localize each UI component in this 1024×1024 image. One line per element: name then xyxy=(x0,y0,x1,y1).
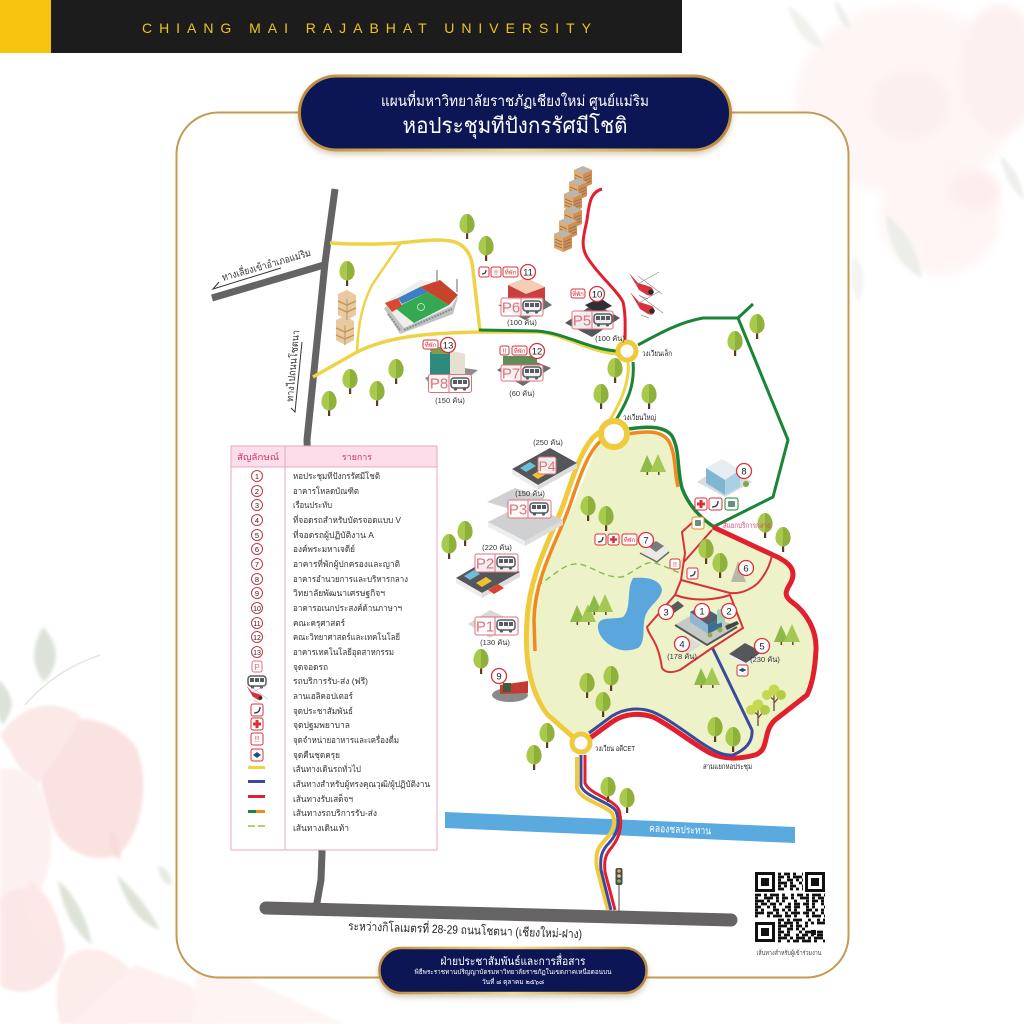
yellow west campus route xyxy=(526,432,600,745)
route network xyxy=(313,189,816,910)
building 9 xyxy=(492,668,528,702)
legend header symbol: สัญลักษณ์ xyxy=(237,451,279,462)
top banner xyxy=(0,0,682,53)
trees xyxy=(321,214,800,813)
legend number symbols: 12 xyxy=(253,635,261,642)
legend item list: จุดจำหน่ายอาหารและเครื่องดื่ม xyxy=(293,734,399,746)
lodging tag 13: ที่พัก xyxy=(425,341,437,349)
legend item list: อาคารอำนวยการและบริหารกลาง xyxy=(293,574,408,584)
PR tag 7 xyxy=(595,534,606,545)
walking path xyxy=(537,563,680,586)
legend number symbols: 8 xyxy=(255,575,259,584)
capacity P5: (100 คัน) xyxy=(595,334,625,343)
food tag 11: !! xyxy=(494,270,498,277)
legend number symbols: 4 xyxy=(255,516,259,525)
PR tag xyxy=(687,568,698,579)
badge number 6: 6 xyxy=(743,564,749,574)
tower beside stadium xyxy=(336,290,356,345)
QR code xyxy=(755,874,825,941)
legend line blue xyxy=(248,780,265,783)
P6 building 11 xyxy=(479,264,552,327)
legend item list: เส้นทางรถบริการรับ-ส่ง xyxy=(293,808,377,818)
P4 lot xyxy=(512,438,577,490)
blue dignitary route xyxy=(589,647,752,755)
orange shuttle west campus xyxy=(534,438,605,651)
capacity P7: (60 คัน) xyxy=(509,389,535,398)
helicopter pad xyxy=(629,272,663,318)
legend food symbol: !! xyxy=(255,735,259,744)
lodging tag 7: ที่พัก xyxy=(624,536,636,544)
lake xyxy=(598,578,662,650)
building 3 xyxy=(658,601,684,620)
badge number 10: 10 xyxy=(592,290,602,300)
P1 lot xyxy=(468,610,518,647)
white map panel xyxy=(176,112,848,978)
legend first aid symbol xyxy=(251,718,263,730)
banner black bar xyxy=(51,0,682,53)
legend item list: จุดจอดรถ xyxy=(293,662,328,673)
legend item list: เส้นทางรับเสด็จฯ xyxy=(293,793,353,804)
capacity 5: (230 คัน) xyxy=(750,655,780,664)
campus green area xyxy=(527,432,815,758)
parking badge P2: P2 xyxy=(476,556,494,572)
parking badge P6: P6 xyxy=(502,300,520,316)
footer subtitle: พิธีพระราชทานปริญญาบัตรมหาวิทยาลัยราชภัฏในเขตภาคเหนือตอนบน xyxy=(414,968,612,976)
main horizontal road xyxy=(266,908,731,920)
legend parking symbol: P xyxy=(254,663,260,672)
circle labels xyxy=(595,348,770,771)
legend item list: อาคารเทคโนโลยีอุตสาหกรรม xyxy=(293,647,394,658)
road caption: ระหว่างกิโลเมตรที่ 28-29 ถนนโชตนา (เชียงใหม่-ฝาง) xyxy=(348,917,582,941)
legend item list: ที่จอดรถผู้ปฏิบัติงาน A xyxy=(293,529,374,541)
PR phone tag 11 xyxy=(479,267,489,277)
legend item list: หอประชุมทีปังกรรัศมีโชติ xyxy=(293,471,380,482)
canal xyxy=(445,812,795,843)
legend line shuttle xyxy=(248,810,265,813)
badge number 4: 4 xyxy=(679,640,685,650)
parking 5 xyxy=(729,638,780,676)
background flowers bottom left xyxy=(0,627,345,1024)
legend item list: คณะครุศาสตร์ xyxy=(293,618,345,629)
legend item list: เส้นทางเดินรถทั่วไป xyxy=(293,763,361,774)
legend food symbol xyxy=(251,733,263,745)
badge number 5: 5 xyxy=(759,642,765,652)
legend helicopter symbol xyxy=(246,685,268,702)
roundabout large xyxy=(601,421,627,447)
PR tag 8 xyxy=(709,498,722,510)
legend number symbols: 9 xyxy=(255,589,259,598)
legend number symbols: 10 xyxy=(253,606,261,613)
lodging tag 12: ที่พัก xyxy=(514,347,526,355)
link green between circles xyxy=(616,362,633,420)
legend header xyxy=(231,446,437,850)
direction label Chotana: ทางไปถนนโชตนา xyxy=(283,329,302,402)
shuttle stop tag xyxy=(692,517,704,529)
gown tag xyxy=(737,665,748,676)
legend item list: จุดคืนชุดครุย xyxy=(293,750,340,761)
legend bus symbol xyxy=(248,676,266,689)
label auditorium junction: สามแยกหอประชุม xyxy=(703,762,752,771)
capacity P2: (220 คัน) xyxy=(482,543,512,552)
food tag 12: !! xyxy=(503,348,506,356)
parking 4 xyxy=(667,635,702,661)
footer date: วันที่ ๘ ตุลาคม ๒๕๖๘ xyxy=(482,977,544,986)
green shuttle to small circle xyxy=(479,330,616,351)
legend item list: เส้นทางสำหรับผู้ทรงคุณวุฒิ/ผู้ปฏิบัติงาน xyxy=(293,779,430,790)
building 2 xyxy=(717,604,739,630)
legend item list: อาคารที่พักผู้ปกครองและญาติ xyxy=(293,558,400,570)
P7 building 12 xyxy=(497,344,551,398)
shuttle tag 8 xyxy=(725,498,738,510)
badge number 11: 11 xyxy=(523,268,533,278)
QR caption: เส้นทางสำหรับผู้เข้าร่วมงาน xyxy=(756,949,822,957)
legend table xyxy=(231,446,437,850)
canal label: คลองชลประทาน xyxy=(649,823,711,837)
parking badge P3: P3 xyxy=(509,502,527,518)
main grey roads xyxy=(212,189,731,920)
direction label Mae Rim: ทางเลี่ยงเข้าอำเภอแม่ริม xyxy=(220,245,312,284)
first aid tag 7 xyxy=(608,534,619,545)
road to Chotana xyxy=(307,189,335,908)
building 8 xyxy=(695,459,752,510)
badge number 8: 8 xyxy=(741,466,747,478)
legend item list: อาคารอเนกประสงค์ด้านภาษาฯ xyxy=(293,603,402,613)
banner university name: CHIANG MAI RAJABHAT UNIVERSITY xyxy=(142,20,592,36)
P3 lot xyxy=(487,488,563,546)
badge number 2: 2 xyxy=(726,606,732,618)
legend number symbols: 1 xyxy=(255,472,259,481)
branch road to Mae Rim xyxy=(212,265,324,298)
inner red route lower loop xyxy=(647,522,772,672)
green shuttle top xyxy=(628,427,716,528)
tricolour entry blue xyxy=(581,755,618,910)
label central services junction: สี่แยกบริการกลาง xyxy=(723,520,770,530)
P2 lot xyxy=(456,543,520,598)
general yellow roads north xyxy=(330,240,480,331)
roundabout small xyxy=(618,342,636,360)
title line two: หอประชุมทีปังกรรัศมีโชติ xyxy=(402,113,628,139)
legend item list: ที่จอดรถสำหรับบัตรจอดแบบ V xyxy=(293,514,401,525)
capacity P6: (100 คัน) xyxy=(507,318,537,327)
legend PR symbol xyxy=(251,704,263,716)
red route north xyxy=(583,189,625,340)
legend item list: องค์พระมหาเจดีย์ xyxy=(293,544,355,554)
legend item list: รถบริการรับ-ส่ง (ฟรี) xyxy=(293,676,368,686)
traffic light xyxy=(616,868,622,912)
legend item list: จุดประชาสัมพันธ์ xyxy=(293,706,353,717)
parking badge P7: P7 xyxy=(502,366,520,382)
title line one: แผนที่มหาวิทยาลัยราชภัฏเชียงใหม่ ศูนย์แม่ริม xyxy=(381,90,649,110)
green shuttle east xyxy=(638,304,788,527)
QR finder centres xyxy=(761,878,819,936)
badge number 3: 3 xyxy=(663,608,669,618)
badge number 7: 7 xyxy=(643,536,649,546)
food tag: !! xyxy=(673,562,677,569)
legend item list: วิทยาลัยพัฒนาเศรษฐกิจฯ xyxy=(293,588,385,599)
auditorium building 1 xyxy=(675,604,737,645)
first aid tag 8 xyxy=(695,498,707,510)
legend number symbols: 5 xyxy=(255,531,259,540)
central junction tags xyxy=(670,517,704,579)
lodging tag 10: ที่พัก xyxy=(572,290,584,298)
badge number 12: 12 xyxy=(532,346,542,358)
legend number symbols: 7 xyxy=(255,560,259,569)
legend number symbols: 11 xyxy=(253,621,261,628)
link yellow between circles xyxy=(610,362,628,420)
legend item list: คณะวิทยาศาสตร์และเทคโนโลยี xyxy=(293,632,400,642)
monument 6 xyxy=(731,560,754,582)
legend gown symbol xyxy=(251,749,263,761)
tricolour entry yellow xyxy=(577,757,614,910)
capacity P3: (150 คัน) xyxy=(515,489,545,498)
legend item list: เรือนประทับ xyxy=(293,500,332,510)
badge number 13: 13 xyxy=(443,340,453,352)
apartment blocks north xyxy=(554,166,592,252)
QR modules xyxy=(755,874,825,941)
yellow stadium link xyxy=(357,244,400,352)
building 7 xyxy=(595,532,669,562)
capacity P8: (150 คัน) xyxy=(435,396,465,405)
QR finder patterns xyxy=(756,874,824,940)
legend line walking xyxy=(248,825,265,827)
parking badge P5: P5 xyxy=(573,312,591,330)
label large roundabout: วงเวียนใหญ่ xyxy=(623,413,656,422)
stadium xyxy=(384,270,458,334)
red outer ring xyxy=(590,527,816,758)
legend item list: จุดปฐมพยาบาล xyxy=(293,720,350,731)
capacity 4: (178 คัน) xyxy=(667,652,697,661)
badge number 1: 1 xyxy=(699,606,705,618)
legend item list xyxy=(293,471,430,833)
legend header list: รายการ xyxy=(342,452,372,462)
legend line red xyxy=(248,795,265,798)
legend item list: เส้นทางเดินเท้า xyxy=(293,823,349,833)
legend item list: อาคารโหลดบัณฑิต xyxy=(293,486,359,496)
label small roundabout: วงเวียนเล็ก xyxy=(642,348,672,358)
legend line yellow xyxy=(248,766,265,769)
footer title: ฝ่ายประชาสัมพันธ์และการสื่อสาร xyxy=(440,953,586,968)
legend number symbols: 2 xyxy=(255,487,259,496)
legend item list: ลานเฮลิคอปเตอร์ xyxy=(293,691,353,701)
parking badge P8: P8 xyxy=(430,376,448,392)
capacity P4: (250 คัน) xyxy=(533,438,563,447)
background flowers top right xyxy=(788,0,1024,303)
parking badge P1: P1 xyxy=(476,618,494,636)
legend number symbols: 6 xyxy=(255,545,259,554)
badge number 9: 9 xyxy=(496,672,502,682)
label CET roundabout: วงเวียน อดีCET xyxy=(595,744,635,753)
lodging tag 11: ที่พัก xyxy=(505,268,517,276)
P5 building 10 xyxy=(565,286,625,343)
title pill xyxy=(300,76,730,150)
orange shuttle top xyxy=(628,432,678,487)
banner yellow block xyxy=(0,0,51,53)
roundabout CET xyxy=(572,734,590,752)
legend number symbols xyxy=(252,470,262,658)
legend number symbols: 13 xyxy=(253,650,261,657)
P8 building 13 xyxy=(423,338,478,405)
parking badge P4: P4 xyxy=(538,458,556,474)
tricolour entry red xyxy=(585,755,621,910)
footer pill xyxy=(380,948,646,993)
legend parking symbol xyxy=(252,661,262,672)
yellow lower road xyxy=(313,332,618,377)
legend number symbols: 3 xyxy=(255,501,259,510)
capacity P1: (130 คัน) xyxy=(480,638,510,647)
